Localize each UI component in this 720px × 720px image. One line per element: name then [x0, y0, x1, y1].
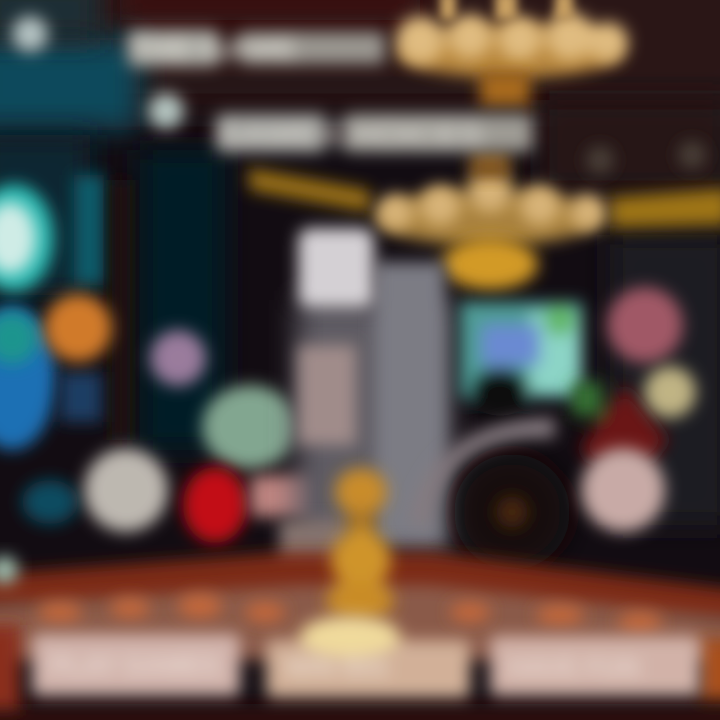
background: room walls and curtains — [0, 0, 720, 525]
central column — [280, 262, 451, 600]
heading line one: THE GAME — [128, 31, 297, 67]
icon: white pink ball — [581, 448, 665, 532]
top chandelier — [396, 0, 628, 106]
icon: cream ball — [644, 366, 696, 418]
icon: green ball — [202, 385, 298, 469]
gold trophy stack — [326, 468, 394, 620]
icon: white square — [298, 228, 374, 308]
icon: pink ball — [150, 330, 206, 386]
icon: red ball — [183, 467, 247, 543]
icon: small chip at left edge — [0, 556, 18, 584]
heading line two: GAME CHOICES — [216, 116, 482, 154]
table top — [0, 552, 720, 720]
icon: top bullet — [12, 16, 48, 52]
grey arc — [420, 428, 555, 525]
icon: dark round badge — [454, 454, 570, 570]
icon: white ball — [84, 448, 168, 532]
left large wheel icons — [0, 184, 102, 450]
bottom panel: right: HAVE FUN — [508, 652, 639, 682]
bottom panel: left — [32, 634, 240, 696]
lower chandelier — [376, 150, 606, 290]
icon: gold mark on badge — [496, 496, 528, 528]
icon: second bullet — [148, 93, 184, 129]
bottom panel: centre: WIN BIG — [285, 652, 389, 682]
icon: orange ball — [44, 294, 112, 362]
icon: pink card — [250, 475, 320, 517]
gold beams — [248, 168, 720, 228]
icon: dark red cluster — [572, 382, 668, 462]
icon: pink ball right — [607, 287, 683, 363]
bottom panel: centre — [266, 616, 470, 698]
bottom panel: right — [490, 636, 700, 696]
icon: teal chip — [22, 480, 78, 524]
heading line one — [128, 30, 385, 67]
table orange markers — [38, 594, 662, 632]
bottom panel: left: PLAY GAMES — [50, 650, 219, 680]
colourful screen — [460, 302, 582, 416]
